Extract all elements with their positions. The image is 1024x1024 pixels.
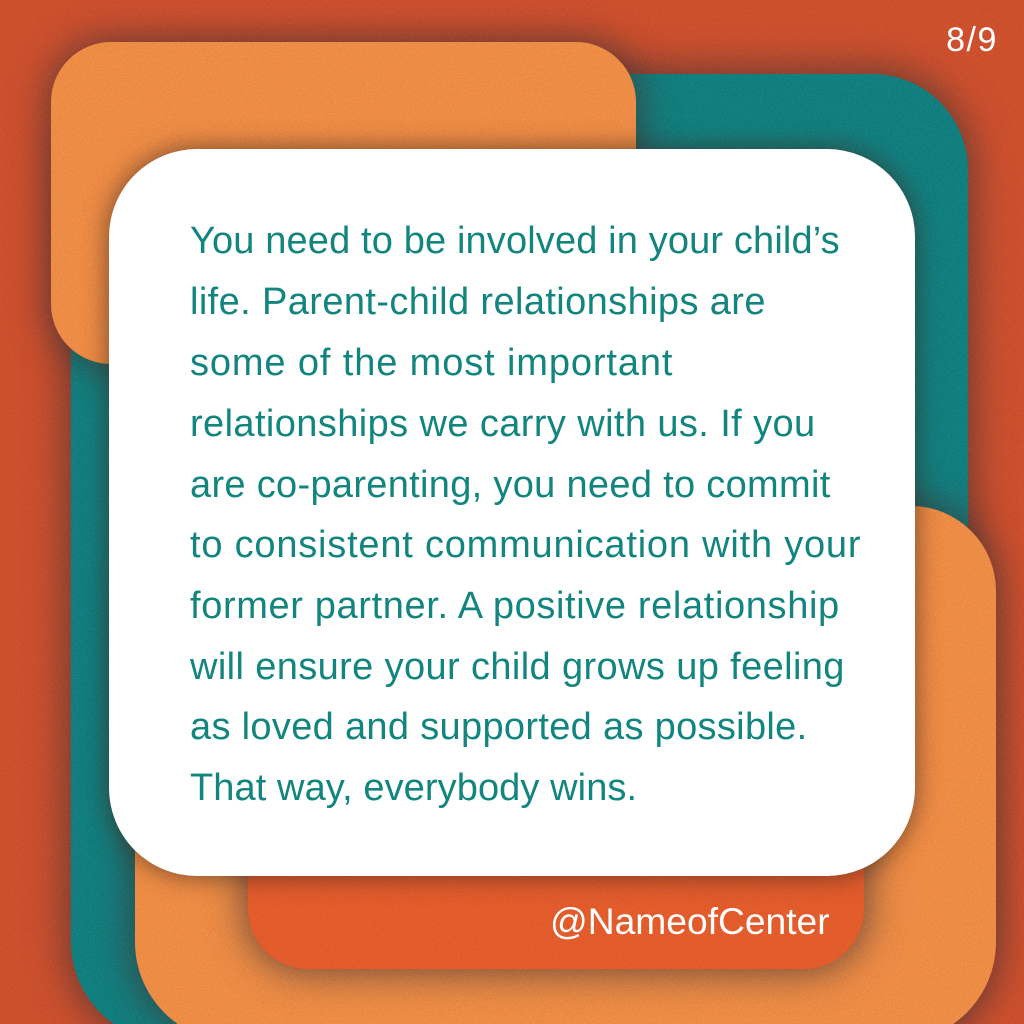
body text: some of the most important xyxy=(190,342,673,384)
body text: That way, everybody wins. xyxy=(190,767,637,809)
body text: are co-parenting, you need to commit xyxy=(190,464,831,506)
panel: orange top-left shape xyxy=(51,42,636,364)
body text: You need to be involved in your child’s xyxy=(190,220,840,262)
panel: white text card xyxy=(109,149,915,876)
body text: former partner. A positive relationship xyxy=(190,585,840,627)
panel: dark orange handle panel xyxy=(248,780,864,969)
page number: 8/9 xyxy=(946,21,998,59)
panel: orange bottom-right shape xyxy=(135,506,996,1024)
body text: life. Parent-child relationships are xyxy=(190,281,766,323)
body text: as loved and supported as possible. xyxy=(190,706,808,748)
body text: relationships we carry with us. If you xyxy=(190,403,816,445)
body text xyxy=(190,220,861,809)
handle: @NameofCenter xyxy=(550,900,830,942)
body text: will ensure your child grows up feeling xyxy=(190,646,845,688)
body text: to consistent communication with your xyxy=(190,524,861,566)
